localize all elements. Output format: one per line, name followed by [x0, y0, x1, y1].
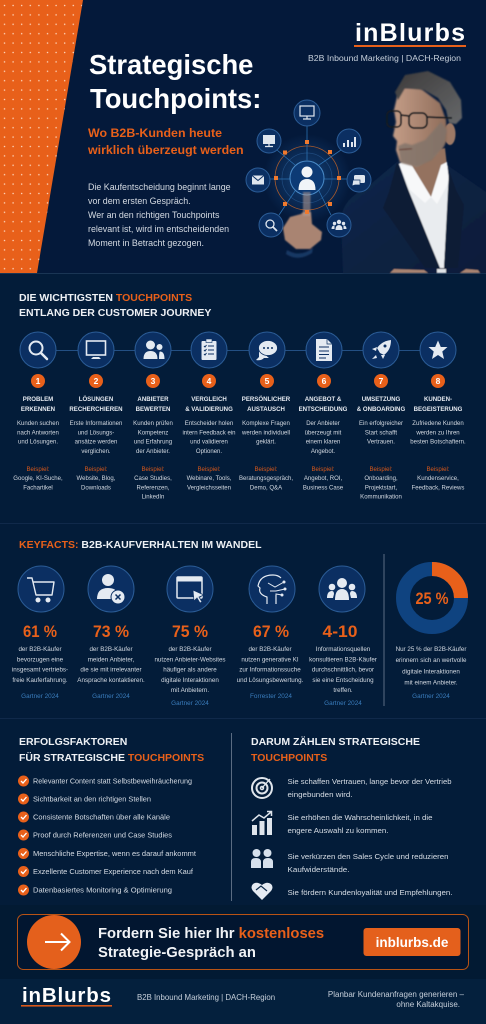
center person [290, 161, 324, 195]
donut chart 25 percent: 25 % [416, 590, 449, 608]
neck [408, 148, 447, 197]
step 4 [182, 332, 236, 491]
reason: sales cycle: Sie verkürzen den Sales Cycle und reduzieren [288, 852, 448, 861]
heading: journey [19, 292, 211, 319]
step title: LÖSUNGEN [79, 396, 113, 403]
lapels [383, 162, 440, 268]
cta button: inblurbs.de [376, 935, 449, 950]
step title [242, 396, 291, 413]
reason: shortlist [252, 812, 432, 835]
step 7 [357, 332, 405, 501]
example [303, 466, 344, 491]
step title: VERGLEICH [191, 396, 227, 403]
nodes [274, 140, 341, 206]
example: Projektstart, [365, 485, 397, 491]
step text: Erste Informationen [70, 421, 122, 427]
reason: trust: Sie schaffen Vertrauen, lange bevor der Vertrieb [288, 777, 452, 786]
donut description: Nur 25 % der B2B-Käufer [396, 646, 466, 653]
step text: Optionen. [196, 449, 222, 455]
footer tagline: B2B Inbound Marketing | DACH-Region [137, 993, 275, 1002]
step text: überzeugt mit [305, 430, 342, 436]
step text: einem klaren [306, 440, 340, 446]
step title: ENTSCHEIDUNG [299, 406, 348, 413]
heading: success factors [19, 736, 204, 764]
description [309, 646, 377, 694]
icon: two people [251, 849, 273, 868]
step 5 [239, 332, 293, 491]
item 5: Menschliche Expertise, wenn es darauf ankommt [33, 849, 196, 858]
suit [341, 162, 486, 273]
step title: ANBIETER [137, 396, 169, 403]
icon: target [252, 778, 272, 798]
example: LinkedIn [142, 495, 164, 501]
example: Beispiel: [197, 466, 221, 473]
step text: Komplexe Fragen [242, 421, 290, 427]
step title [21, 396, 55, 413]
step text [241, 421, 290, 446]
panel: success factors [18, 736, 204, 896]
description: mit Anbietern. [171, 687, 209, 694]
step title: & ONBOARDING [357, 406, 405, 413]
step text [70, 421, 122, 455]
value: 4-10 [322, 623, 358, 641]
step text [17, 421, 59, 446]
icon: group [319, 566, 365, 612]
example: Beispiel: [141, 466, 165, 473]
step text [182, 421, 236, 455]
number 3: 3 [151, 376, 156, 386]
step text: nach Antworten [17, 430, 59, 436]
description: Informationsquellen [316, 646, 371, 653]
heading: journey: ENTLANG DER CUSTOMER JOURNEY [19, 307, 211, 319]
heading: why [251, 735, 420, 764]
description: bevorzugen eine [17, 656, 64, 664]
example: Webinare, Tools, [187, 476, 232, 482]
step text: geklärt. [256, 440, 276, 446]
description: sie eine Entscheidung [312, 677, 374, 684]
step text: der Anbieter. [136, 449, 170, 455]
step title: BEGEISTERUNG [414, 406, 463, 413]
description: die sie mit irrelevanter [80, 666, 142, 674]
step text: Der Anbieter [306, 421, 340, 427]
step text: Ein erfolgreicher [359, 421, 403, 427]
heading: success factors: FÜR STRATEGISCHE TOUCHPOINTS [19, 751, 204, 764]
reason: sales cycle [251, 849, 448, 874]
step text: Kunden suchen [17, 421, 59, 427]
hand pointing [283, 192, 322, 258]
reason: shortlist: engere Auswahl zu kommen. [288, 826, 388, 835]
portrait: businessman [341, 71, 486, 273]
icon: chat bubbles [249, 332, 285, 368]
step text [410, 421, 466, 446]
description: durchschnittlich, bevor [312, 666, 374, 674]
step text: Angebot. [311, 449, 335, 455]
panel: keyfacts [12, 539, 467, 707]
icon: mail [246, 168, 270, 192]
step title: ERKENNEN [21, 406, 55, 413]
description: nutzen generative KI [241, 656, 299, 664]
reason: loyalty [252, 883, 452, 900]
value: 67 % [253, 623, 289, 641]
example [134, 466, 172, 501]
step title: RECHERCHIEREN [69, 406, 123, 413]
icon: clipboard [191, 332, 227, 368]
reason: trust: eingebunden wird. [288, 790, 352, 799]
heading: why: DARUM ZÄHLEN STRATEGISCHE [251, 735, 420, 748]
intro text: relevant ist, wird im entscheidenden [88, 224, 229, 234]
value: 61 % [23, 623, 57, 641]
description: der B2B-Käufer [89, 646, 133, 653]
example: Beispiel: [254, 466, 278, 473]
intro text: vor dem ersten Gespräch. [88, 196, 191, 206]
example: Beispiel: [369, 466, 393, 473]
panel: customer journey [13, 292, 466, 501]
intro text [88, 182, 231, 248]
example: Onboarding, [364, 476, 398, 482]
title: Touchpoints: [90, 83, 261, 114]
item 6: Exzellente Customer Experience nach dem Kauf [33, 867, 194, 876]
donut description [396, 646, 467, 686]
example [187, 466, 232, 491]
source: Gartner 2024 [21, 693, 59, 700]
number 7: 7 [379, 376, 384, 386]
icon: cart [18, 566, 64, 612]
donut chart 25 percent [403, 569, 461, 627]
example [13, 466, 63, 491]
step 8 [410, 332, 466, 491]
panel: header [0, 0, 486, 274]
cta text: Fordern Sie hier Ihr kostenloses [98, 926, 324, 942]
icon: rocket [363, 332, 399, 368]
example: Case Studies, [134, 476, 172, 482]
step title: ANGEBOT & [305, 396, 342, 403]
step title: UMSETZUNG [362, 396, 401, 403]
description: konsultieren B2B-Käufer [309, 656, 377, 664]
value: 73 % [93, 623, 129, 641]
value: 75 % [172, 623, 208, 641]
step title: AUSTAUSCH [247, 406, 285, 413]
step text: und Lösungs- [78, 430, 114, 436]
step text: besten Botschaftern. [410, 440, 466, 446]
step 6 [299, 332, 348, 491]
number 7 [374, 374, 388, 388]
item 3: Consistente Botschaften über alle Kanäle [33, 812, 170, 822]
step title: & VALIDIERUNG [185, 406, 233, 413]
subtitle: wirklich überzeugt werden [87, 143, 244, 157]
example: Beispiel: [84, 466, 108, 473]
step title: PERSÖNLICHER [242, 396, 291, 403]
description: zur Informationssuche [239, 666, 301, 674]
step text: und Erfahrung [134, 440, 172, 446]
title [89, 49, 261, 114]
intro text: Wer an den richtigen Touchpoints [88, 210, 220, 220]
example [360, 466, 402, 501]
source: Gartner 2024 [324, 700, 362, 707]
step text [305, 421, 342, 455]
intro text: Die Kaufentscheidung beginnt lange [88, 182, 231, 192]
panel: why touchpoints matter [251, 735, 452, 900]
panel: footer [0, 979, 486, 1024]
cta text: Strategie-Gespräch an [98, 945, 256, 961]
fact 75 percent [154, 566, 226, 707]
step title: PROBLEM [23, 396, 53, 403]
description: nutzen Anbieter-Websites [154, 656, 226, 664]
step text: Vertrauen. [367, 440, 395, 446]
number 6: 6 [322, 376, 327, 386]
icon: chart [337, 129, 361, 153]
footer claim: ohne Kaltakquise. [396, 1000, 460, 1009]
fact 61 percent [12, 566, 68, 700]
item 1: Relevanter Content statt Selbstbeweihräucherung [33, 776, 192, 786]
step title [414, 396, 463, 413]
step title: KUNDEN- [424, 396, 452, 403]
icon: person with x [88, 566, 134, 612]
step text: ansätze werden [75, 440, 117, 446]
example: Fachartikel [23, 485, 53, 491]
footer claim: Planbar Kundenanfragen generieren – [328, 990, 465, 999]
number 4 [202, 374, 216, 388]
step text [133, 421, 173, 455]
step 1 [13, 332, 63, 491]
network graphic [246, 100, 371, 258]
donut description: mit einem Anbieter. [404, 680, 458, 686]
step title [299, 396, 348, 413]
subtitle: Wo B2B-Kunden heute [88, 126, 222, 140]
number 8: 8 [436, 376, 441, 386]
step title [357, 396, 405, 413]
example: Downloads [81, 485, 111, 491]
description [12, 646, 68, 684]
donut source: Gartner 2024 [412, 693, 450, 700]
source: Gartner 2024 [92, 693, 130, 700]
subtitle [87, 126, 244, 157]
number 8 [431, 374, 445, 388]
icon: heart handshake [252, 883, 272, 900]
step text: werden zu Ihren [415, 430, 460, 436]
icon: monitor [78, 332, 114, 368]
example: Angebot, ROI, [304, 476, 342, 482]
icon: search [259, 213, 283, 237]
number 6 [317, 374, 331, 388]
heading: keyfacts: KEYFACTS: B2B-KAUFVERHALTEN IM WANDEL [19, 539, 262, 551]
connector line [38, 349, 438, 352]
icon: AI head [249, 566, 295, 612]
example: Kundenservice, [417, 476, 459, 482]
icon: magnifier [20, 332, 56, 368]
donut description: erinnern sich an wertvolle [396, 657, 467, 664]
item 7: Datenbasiertes Monitoring & Optimierung [33, 886, 172, 894]
example: Kommunikation [360, 495, 402, 501]
description [237, 646, 304, 684]
step title [185, 396, 233, 413]
step text: intern Feedback ein [182, 430, 236, 436]
cta text [98, 926, 324, 961]
icon: star [420, 332, 456, 368]
description: treffen. [333, 687, 353, 694]
step text: Kompetenz [138, 430, 168, 436]
example: Beratungsgespräch, [239, 476, 293, 482]
logo: inBlurbs footer: inBlurbs [22, 984, 111, 1007]
step text: und validieren [190, 440, 228, 446]
orange dotted wedge [0, 0, 83, 273]
face [393, 88, 447, 167]
example: Google, KI-Suche, [13, 476, 63, 482]
glasses [387, 111, 452, 128]
step text [359, 421, 403, 446]
icon: group [327, 213, 351, 237]
number 1: 1 [36, 376, 41, 386]
icon: document [306, 332, 342, 368]
intro text: Moment in Betracht gezogen. [88, 238, 204, 248]
title: Strategische [89, 49, 253, 80]
step 3 [133, 332, 173, 501]
description: der B2B-Käufer [248, 646, 292, 653]
heading: journey: DIE WICHTIGSTEN TOUCHPOINTS [19, 292, 192, 304]
hair [395, 71, 462, 124]
description: insgesamt vertriebs- [12, 666, 68, 674]
reason: trust [252, 777, 452, 799]
step text: Entscheider holen [185, 421, 233, 427]
panel: call to action [0, 905, 486, 979]
shirt [399, 164, 449, 268]
icon: monitor left [257, 129, 281, 153]
arrow button [27, 915, 81, 969]
number 1 [31, 374, 45, 388]
icon: monitor top [294, 100, 320, 126]
reason: loyalty: Sie fördern Kundenloyalität und Empfehlungen. [288, 888, 452, 897]
step text: werden individuell [241, 430, 290, 436]
step text: und Lösungen. [18, 440, 58, 446]
icon: growth chart [252, 812, 272, 835]
item 4: Proof durch Referenzen und Case Studies [33, 830, 172, 840]
step text: Zufriedene Kunden [412, 421, 464, 427]
description: freie Kauferfahrung. [12, 677, 68, 684]
description [77, 646, 145, 684]
fact 67 percent [237, 566, 304, 700]
number 5: 5 [265, 376, 270, 386]
footer claim [328, 990, 465, 1009]
step title [69, 396, 123, 413]
example: Beispiel: [426, 466, 450, 473]
fact 73 percent [77, 566, 145, 700]
icon: browser window [167, 566, 213, 612]
example: Feedback, Reviews [412, 485, 464, 491]
example: Beispiel: [311, 466, 335, 473]
forearms [390, 269, 480, 273]
step title [136, 396, 170, 413]
item 2: Sichtbarkeit an den richtigen Stellen [33, 794, 151, 804]
heading: success factors: ERFOLGSFAKTOREN [19, 736, 127, 748]
cta button [364, 928, 460, 956]
example: Demo, Q&A [250, 485, 283, 491]
example: Website, Blog, [77, 476, 116, 482]
tagline: B2B Inbound Marketing | DACH-Region [308, 53, 461, 63]
example: Referenzen, [137, 485, 170, 491]
source: Forrester 2024 [250, 693, 292, 700]
description: und Lösungsbewertung. [237, 677, 304, 684]
example: Business Case [303, 485, 344, 491]
beard [398, 122, 447, 167]
donut description: digitale Interaktionen [402, 668, 460, 676]
logo: inBlurbs header: inBlurbs [355, 19, 465, 47]
source: Gartner 2024 [171, 700, 209, 707]
description: meiden Anbieter, [88, 656, 135, 664]
number 2: 2 [94, 376, 99, 386]
step 2 [69, 332, 123, 491]
icon: chat [347, 168, 371, 192]
mouth [399, 148, 412, 150]
description: häufiger als andere [163, 666, 217, 674]
step text: verglichen. [81, 449, 111, 455]
description: der B2B-Käufer [168, 646, 212, 653]
description [154, 646, 226, 694]
number 4: 4 [207, 376, 212, 386]
icon: people [135, 332, 171, 368]
example: Vergleichsseiten [187, 485, 231, 491]
description: der B2B-Käufer [18, 646, 62, 653]
example: Beispiel: [26, 466, 50, 473]
number 3 [146, 374, 160, 388]
step text: Kunden prüfen [133, 421, 173, 427]
example [412, 466, 464, 491]
fact 4-10 [309, 566, 377, 707]
reason: shortlist: Sie erhöhen die Wahrscheinlichkeit, in die [288, 813, 432, 822]
description: digitale Interaktionen [161, 677, 219, 684]
step title: BEWERTEN [136, 406, 170, 413]
ear [444, 123, 456, 145]
description: Ansprache kontaktieren. [77, 677, 145, 684]
reason: sales cycle: Kaufwiderstände. [288, 865, 350, 874]
number 2 [89, 374, 103, 388]
example [239, 466, 293, 491]
step text: Start schafft [365, 430, 397, 436]
number 5 [260, 374, 274, 388]
heading: why: TOUCHPOINTS [251, 752, 327, 764]
example [77, 466, 116, 491]
